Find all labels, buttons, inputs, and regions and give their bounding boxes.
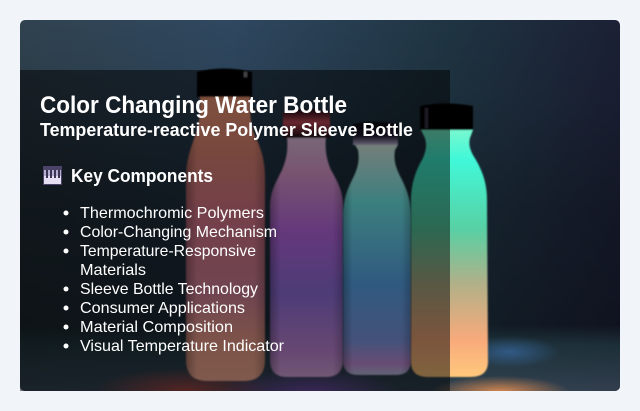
list of key components: Visual Temperature Indicator [80, 338, 285, 355]
list of key components: Consumer Applications [80, 300, 245, 317]
list of key components [64, 205, 285, 355]
dark text panel [20, 70, 450, 391]
list of key components: Thermochromic Polymers [80, 205, 264, 222]
heading: key components: Key Components [71, 166, 213, 186]
teal-blue bottle [343, 122, 411, 375]
title: Color Changing Water Bottle [40, 92, 347, 119]
list of key components: Color-Changing Mechanism [80, 224, 277, 241]
list of key components: Materials [80, 262, 146, 279]
subtitle: Temperature-reactive Polymer Sleeve Bottle [40, 120, 413, 140]
list of key components: Material Composition [80, 319, 233, 336]
red bottle [186, 68, 265, 381]
purple bottle [270, 110, 343, 377]
list of key components: Temperature-Responsive [80, 243, 256, 260]
green-orange glowing bottle [411, 104, 488, 377]
list of key components: Sleeve Bottle Technology [80, 281, 258, 298]
icon: piano keys [43, 166, 62, 185]
